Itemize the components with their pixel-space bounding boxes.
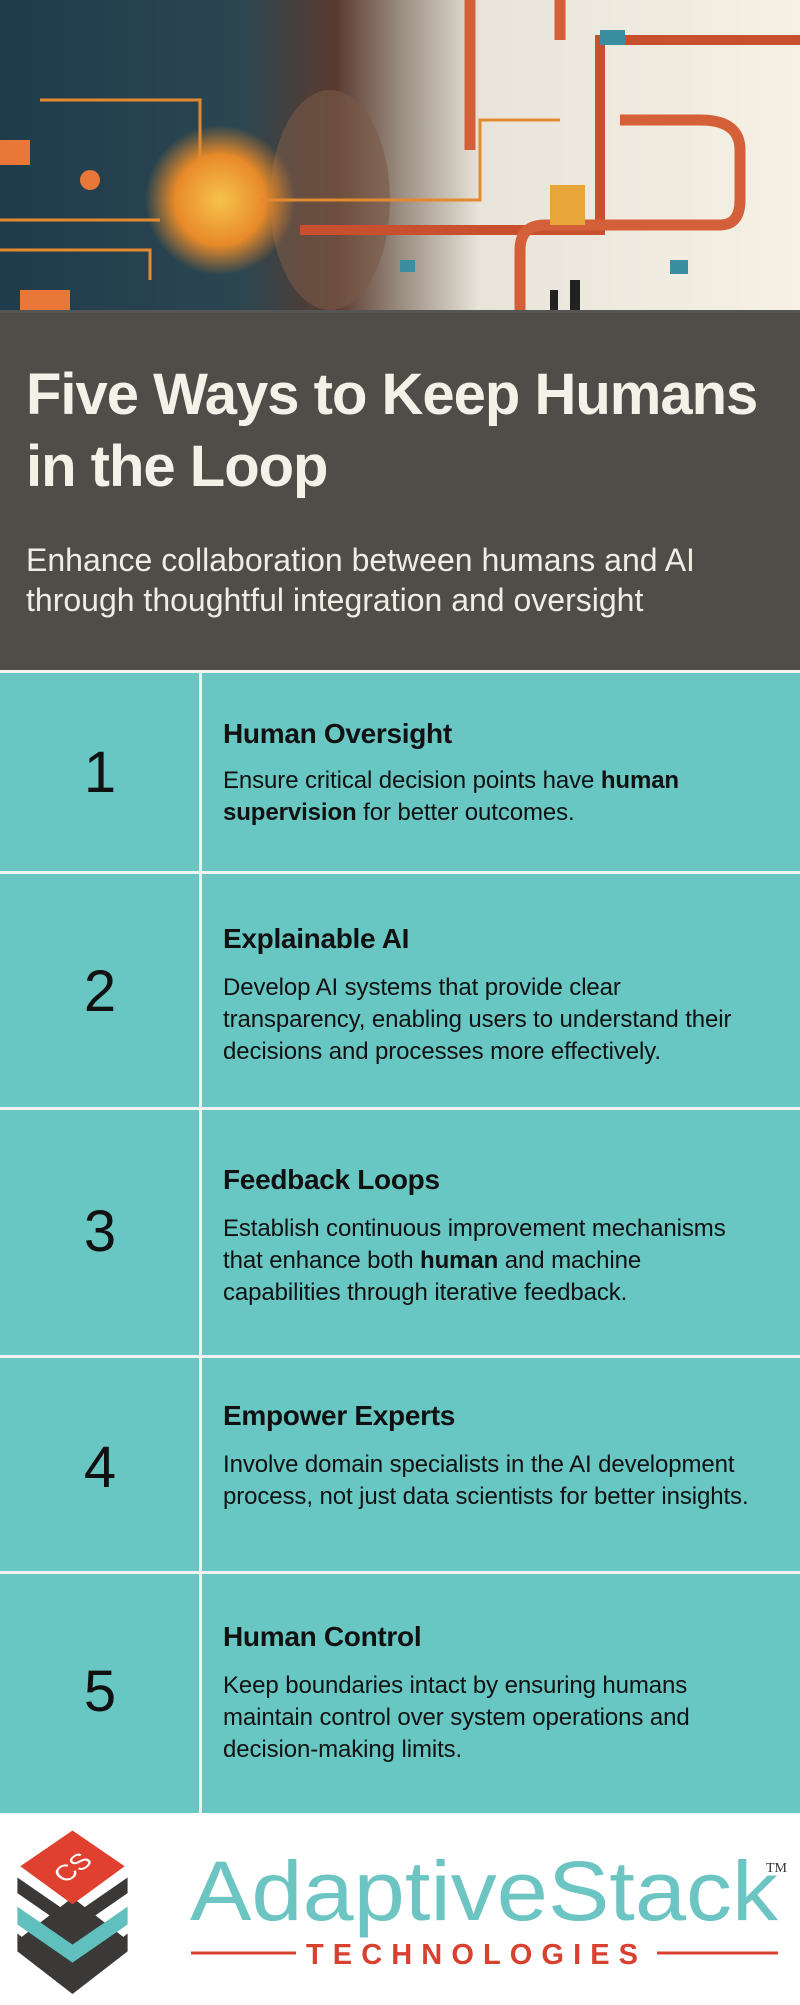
heading 5: Human Control <box>223 1621 421 1652</box>
logo: TECHNOLOGIES <box>306 1939 638 1971</box>
wordmark: AdaptiveStack <box>190 1844 779 1938</box>
heading 3: Feedback Loops <box>223 1164 440 1195</box>
row 3 <box>0 1107 800 1356</box>
heading 2: Explainable AI <box>223 923 409 954</box>
body 1 <box>223 767 679 826</box>
body 1: supervision for better outcomes. <box>223 799 575 826</box>
logo <box>17 1830 788 1994</box>
body 3: that enhance both human and machine <box>223 1247 641 1274</box>
body 3: capabilities through iterative feedback. <box>223 1279 627 1306</box>
body 1: Ensure critical decision points have human <box>223 767 679 794</box>
body 5: maintain control over system operations and <box>223 1704 690 1731</box>
number 4: 4 <box>84 1435 116 1500</box>
body 2 <box>223 974 732 1065</box>
title: in the Loop <box>26 434 328 499</box>
body 3: Establish continuous improvement mechanisms <box>223 1215 726 1242</box>
icon: stacked layers: CS <box>48 1848 99 1888</box>
number 2: 2 <box>84 959 116 1024</box>
row 5 <box>0 1571 800 1813</box>
body 5: Keep boundaries intact by ensuring humans <box>223 1672 687 1699</box>
body 5 <box>223 1672 690 1763</box>
title: Five Ways to Keep Humans <box>26 362 757 427</box>
subtitle: through thoughtful integration and oversight <box>26 582 643 618</box>
body 2: decisions and processes more effectively. <box>223 1038 661 1065</box>
body 4 <box>223 1451 749 1510</box>
number 3: 3 <box>84 1199 116 1264</box>
title panel <box>0 313 800 670</box>
body 4: Involve domain specialists in the AI development <box>223 1451 734 1478</box>
number 1: 1 <box>84 740 116 805</box>
header image: circuit art <box>0 0 800 313</box>
body 5: decision-making limits. <box>223 1736 462 1763</box>
row 4 <box>0 1355 800 1573</box>
subtitle: Enhance collaboration between humans and AI <box>26 542 695 578</box>
icon: stacked layers <box>17 1830 128 1994</box>
body 4: process, not just data scientists for better insights. <box>223 1483 749 1510</box>
logo: TM <box>766 1861 788 1876</box>
number 5: 5 <box>84 1659 116 1724</box>
body 2: transparency, enabling users to understand their <box>223 1006 731 1033</box>
body 3 <box>223 1215 726 1306</box>
body 2: Develop AI systems that provide clear <box>223 974 621 1001</box>
row 2 <box>0 871 800 1109</box>
row 1 <box>0 670 800 873</box>
heading 1: Human Oversight <box>223 718 452 749</box>
title <box>26 362 757 499</box>
heading 4: Empower Experts <box>223 1400 455 1431</box>
subtitle <box>26 542 695 618</box>
